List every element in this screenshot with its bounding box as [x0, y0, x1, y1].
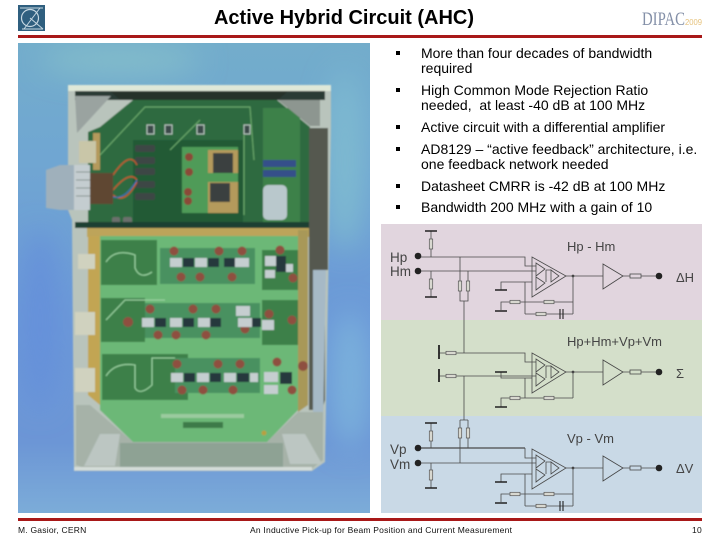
- text: active circuit: Active circuit with a differential amplifier: [421, 119, 665, 135]
- wires: [113, 159, 137, 198]
- channel V circuit: Vp - Vm: [567, 431, 614, 446]
- red components upper: [184, 153, 193, 205]
- text: CMRR: needed, at least -40 dB at 100 MHz: [421, 97, 645, 113]
- text: bandwidth: required: [421, 60, 472, 76]
- board traces: [106, 253, 175, 391]
- channel V circuit: Vp: [390, 442, 407, 457]
- housing corners: [75, 96, 111, 133]
- text: CMRR: [421, 82, 648, 113]
- title: Active Hybrid Circuit (AHC): [214, 7, 474, 29]
- text: datasheet CMRR: Datasheet CMRR is -42 dB at 100 MHz: [421, 178, 665, 194]
- row 3: [171, 358, 308, 394]
- channel V circuit: [390, 416, 694, 511]
- top small components: [147, 125, 250, 134]
- right housing wall: [309, 128, 328, 410]
- footer: page number: 10: [692, 525, 702, 535]
- three component rows: [123, 246, 308, 394]
- gold band and strips: [87, 228, 309, 237]
- housing frame: [68, 86, 331, 471]
- board silkscreen label: [183, 422, 223, 428]
- text: AD8129: one feedback network needed: [421, 156, 609, 172]
- photo: circuit board in housing: [18, 43, 370, 513]
- channel H circuit: Hp: [390, 250, 407, 265]
- text: AD8129: [421, 141, 697, 172]
- dark ground patches: [101, 240, 298, 400]
- text: CMRR: High Common Mode Rejection Ratio: [421, 82, 648, 98]
- row 1: [160, 246, 298, 284]
- left side connectors: [75, 254, 95, 392]
- channel H circuit: Hp - Hm: [567, 239, 615, 254]
- blue capacitors and label: [263, 160, 296, 167]
- bullet 6: [396, 205, 400, 208]
- row 2: [123, 303, 296, 340]
- inductors: [112, 145, 155, 237]
- text: bandwidth gain: Bandwidth 200 MHz with a gain of 10: [421, 199, 652, 215]
- channel sum circuit: Σ: [676, 366, 684, 381]
- bullet 5: [396, 184, 400, 188]
- photo background: [18, 43, 370, 513]
- left connector: [46, 165, 74, 210]
- bottom red rule: [18, 518, 702, 521]
- channel H circuit: ΔH: [676, 270, 694, 285]
- text: bandwidth: [421, 45, 652, 76]
- top red rule: [18, 35, 702, 38]
- icon: CERN logo: [18, 5, 45, 31]
- text: AD8129: AD8129 – “active feedback” architecture, i.e.: [421, 141, 697, 157]
- gold pad left: [93, 133, 100, 170]
- channel H circuit: Hm: [390, 264, 411, 279]
- band: vertical channel: [381, 416, 702, 513]
- bullet 3: [396, 125, 400, 128]
- channel sum circuit: Hp+Hm+Vp+Vm: [567, 334, 662, 349]
- bullet 1: [396, 51, 400, 54]
- lower board: [100, 236, 298, 442]
- bullet 4: [396, 147, 400, 150]
- channel V circuit: Vm: [390, 457, 410, 472]
- channel H circuit: [390, 231, 694, 353]
- schematic diagram: [381, 224, 702, 513]
- upper board: [88, 100, 310, 226]
- channel sum circuit: [439, 334, 684, 416]
- bottom housing: [76, 405, 323, 470]
- band: horizontal channel: [381, 224, 702, 320]
- channel V circuit: ΔV: [676, 461, 694, 476]
- bullet 2: [396, 88, 400, 92]
- icon: DIPAC 2009 logo: 2009: [685, 17, 702, 27]
- bullet list: [396, 45, 697, 215]
- text: bandwidth: More than four decades of bandwidth: [421, 45, 652, 61]
- band: sum channel: [381, 320, 702, 416]
- footer: talk title: An Inductive Pick-up for Beam Position and Current Measurement: [250, 525, 512, 535]
- footer: author: M. Gasior, CERN: [18, 525, 86, 535]
